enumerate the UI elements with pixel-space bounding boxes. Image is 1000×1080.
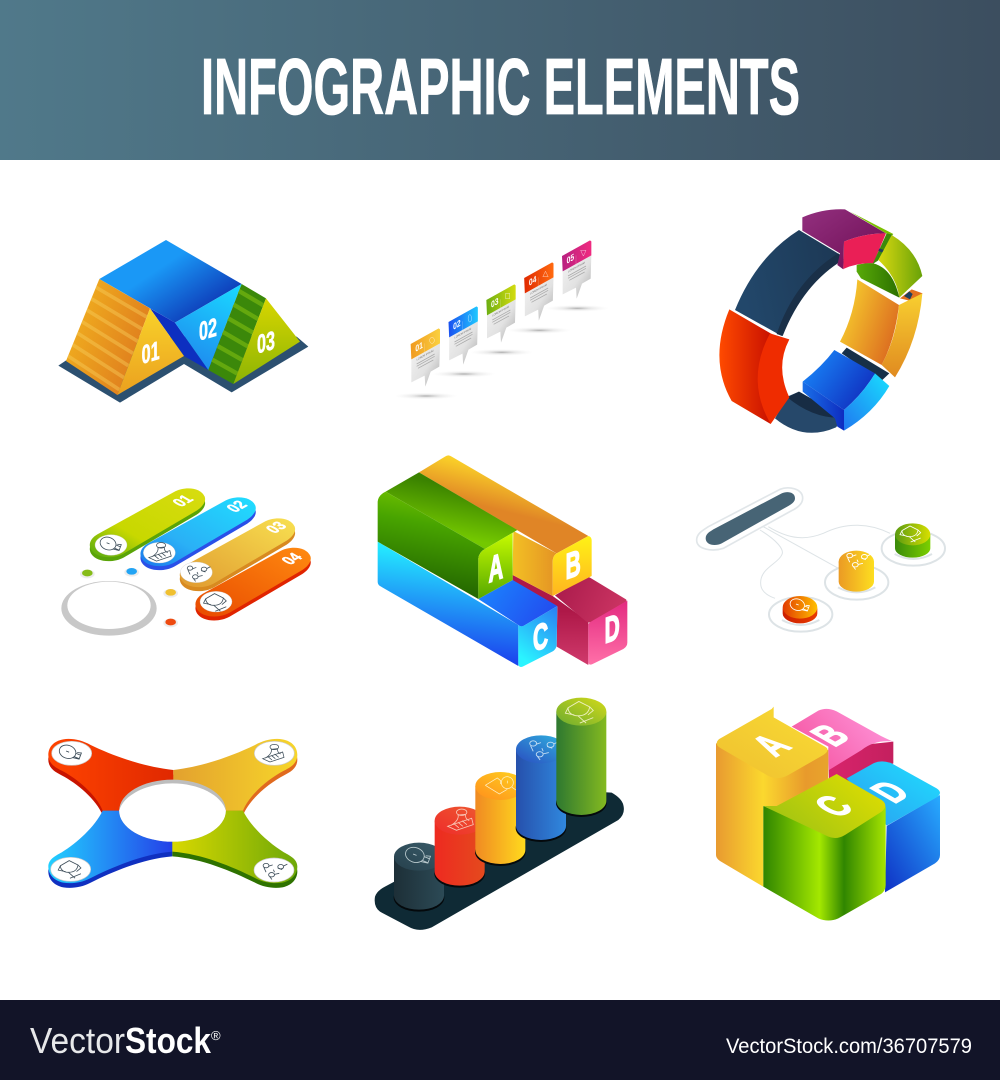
base platform [375, 790, 624, 930]
green petal [172, 811, 297, 883]
triangle 03 [233, 298, 300, 384]
bar 1 dark [394, 843, 444, 912]
pin 03: 03 [491, 295, 499, 310]
bar C top [478, 580, 557, 626]
chart: ascending cylinder bars [375, 698, 624, 930]
footer logo: ® [211, 1028, 221, 1043]
yellow side face [882, 293, 922, 377]
block C body [763, 806, 886, 920]
red petal [48, 739, 173, 811]
centre hole [119, 780, 226, 842]
chart: connected cylinders diagram [697, 488, 945, 632]
chart: isometric blocks A B C D [716, 707, 940, 920]
pin 02: 02 [453, 317, 461, 332]
blue lower band [803, 382, 844, 431]
red segment [719, 309, 772, 424]
pink segment [843, 233, 886, 269]
pill 03: 03 [262, 519, 291, 536]
pill 02 [140, 497, 256, 570]
cyan side face [844, 373, 889, 431]
bar B front [553, 536, 592, 596]
yellow petal [173, 739, 297, 811]
navy connector [842, 348, 889, 381]
number 02: 02 [199, 312, 217, 347]
bar D top [555, 577, 627, 623]
bar C side [378, 542, 518, 666]
bar B top [419, 455, 588, 553]
letter C: C [804, 789, 863, 823]
pin 01: 01 [415, 339, 423, 354]
green edge strip [850, 212, 893, 264]
pin 03: LOREM IPSUM [492, 304, 510, 318]
pin 03 [486, 284, 516, 343]
extruded side edges [48, 744, 297, 888]
letter B: B [566, 543, 581, 588]
pin 04: LOREM IPSUM [530, 282, 548, 296]
header bar outline [697, 488, 803, 550]
pill 01 [90, 488, 205, 561]
footer logo [30, 1020, 221, 1061]
striped orange face [66, 279, 150, 395]
header band [0, 0, 1000, 160]
purple segment [802, 209, 886, 269]
red cylinder [783, 596, 817, 623]
pin 04 [524, 262, 553, 321]
block D side [885, 795, 940, 892]
pin shadows [394, 305, 609, 399]
pill 01: 01 [169, 493, 198, 509]
block B side [828, 742, 893, 787]
footer logo: Vector [30, 1020, 125, 1061]
pin 02 [448, 306, 478, 365]
chart: four isometric pills [61, 488, 311, 636]
pin 05: 05 [567, 251, 574, 266]
bar 3 orange [475, 772, 526, 866]
blue segment [803, 350, 875, 410]
footer logo: Stock [125, 1020, 212, 1061]
bar A top [386, 472, 517, 549]
block B top [792, 709, 893, 770]
orange top sliver [900, 289, 923, 301]
yellow segment [840, 279, 899, 365]
lime segment [878, 235, 922, 298]
letter B: B [800, 718, 860, 752]
block D top [847, 761, 940, 826]
small dots [80, 568, 178, 627]
green cylinder [895, 523, 930, 558]
pin 04: 04 [529, 273, 537, 288]
block A body [716, 743, 828, 887]
pill 04 [195, 548, 311, 620]
blue petal [48, 811, 172, 883]
bar 4 blue [516, 735, 566, 842]
pin 05: LOREM IPSUM [568, 260, 585, 274]
bar D front [588, 601, 627, 665]
bar A front [478, 530, 517, 599]
letter A: A [489, 546, 503, 591]
striped green face [208, 284, 266, 384]
icon discs [51, 741, 294, 882]
bar 2 red [434, 807, 485, 888]
bar B side [513, 531, 557, 596]
footer band [0, 1000, 1000, 1080]
pin 02: LOREM IPSUM [454, 326, 472, 340]
chart: triangular prism panels 01 02 03 [58, 240, 308, 403]
green inner face [857, 263, 899, 298]
target rings [769, 531, 945, 632]
chart: isometric bars A B C D [378, 455, 627, 667]
ring base [61, 581, 157, 636]
letter D: D [860, 775, 920, 809]
header bar [706, 492, 795, 545]
footer image id: VectorStock.com/36707579 [726, 1035, 972, 1058]
pin 05 [562, 240, 591, 299]
chart: segmented isometric ring [719, 209, 923, 433]
chart: four-petal cross diagram [48, 739, 297, 888]
triangle 02 [175, 284, 242, 370]
pin 01 [411, 328, 440, 387]
pill 03 [180, 518, 295, 591]
bar A side [378, 492, 485, 599]
base plate [58, 337, 308, 403]
bar D left side [513, 575, 588, 665]
pin 01: LOREM IPSUM [417, 348, 434, 362]
letter D: D [605, 607, 620, 652]
bar 5 green [556, 698, 607, 817]
pill 02: 02 [223, 498, 252, 515]
navy bottom segment [775, 392, 844, 433]
chart: five isometric map pins [394, 240, 609, 399]
block C top [763, 774, 885, 838]
red side face [758, 333, 789, 424]
bar C front [518, 606, 557, 667]
number 03: 03 [257, 325, 275, 360]
triangle 01 [117, 308, 184, 395]
top face [99, 240, 242, 323]
inner dark face [150, 308, 208, 370]
pill 04: 04 [278, 550, 307, 567]
number 01: 01 [142, 335, 160, 370]
navy upper-left segment [735, 230, 844, 336]
letter A: A [741, 728, 801, 762]
connector lines [760, 525, 890, 598]
block A top [717, 707, 828, 778]
letter C: C [533, 615, 548, 660]
yellow cylinder [839, 551, 874, 592]
